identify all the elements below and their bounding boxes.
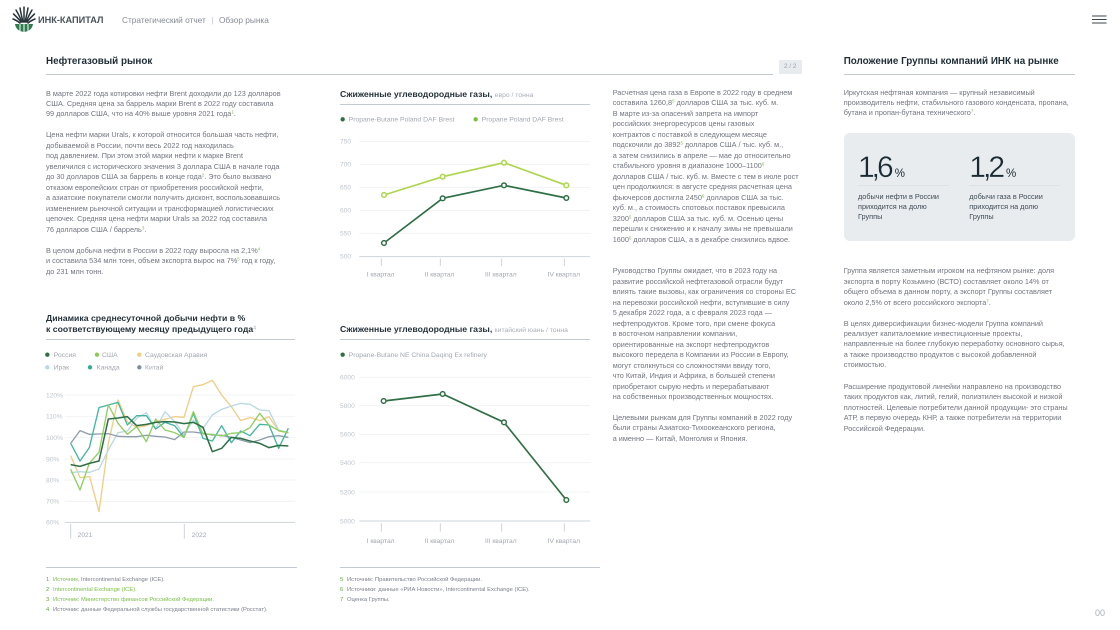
stat: gas share: приходится на долю <box>969 202 1038 211</box>
chart: daily oil production: 80% <box>46 477 59 484</box>
text: production: В целом добыча нефти в России в 2022 году выросла на 2,1%4 <box>46 246 260 255</box>
text: Urals: до 30 долларов США за баррель в конце года2. Это было вызвано <box>46 172 271 181</box>
text: management expectations: на собственных производственных мощностях. <box>613 392 774 401</box>
text: gas price in Europe: а затем снизились в апреле — мае до относительно <box>613 151 791 160</box>
text: production: и составила 534 млн тонн, объем экспорта вырос на 7%5 год к году, <box>46 256 275 265</box>
chart: daily oil production: 100% <box>46 435 63 442</box>
chart: LPG euro per tonne: 700 <box>340 162 351 169</box>
text: gas price in Europe: 32005 долларов США за тыс. куб. м. Осенью цены <box>613 214 783 223</box>
text: market player: Группа является заметным игроком на нефтяном рынке: доля <box>844 266 1054 275</box>
footnotes: left: Источник, Intercontinental Exchange (ICE). <box>53 576 165 582</box>
text: diversification: стоимостью. <box>844 360 886 369</box>
footnotes: right: Источник: Правительство Российской Федерации. <box>347 576 482 582</box>
chart: daily oil production: США <box>102 352 118 359</box>
chart: LPG yuan per tonne: 5000 <box>340 518 355 525</box>
text: gas price in Europe: стабильного уровня в диапазоне 1000–11006 <box>613 161 764 170</box>
text: management expectations: 5 декабря 2022 года, а с февраля 2023 года — <box>613 308 772 317</box>
chart: daily oil production: Канада <box>97 365 120 372</box>
text: management expectations: ориентированные на экспорт нефтепродуктов <box>613 340 769 349</box>
text: diversification <box>844 318 1065 369</box>
text: company intro <box>844 88 1069 117</box>
footnotes: right: 7 <box>340 596 343 602</box>
heading: group market position: Положение Группы компаний ИНК на рынке <box>844 56 1059 66</box>
text: Urals <box>46 130 280 234</box>
chart: daily oil production: Китай <box>145 364 164 372</box>
chart: LPG yuan per tonne <box>340 352 590 545</box>
heading: LPG yuan chart: Сжиженные углеводородные газы, китайский юань / тонна <box>340 324 568 334</box>
heading: daily production chart: к соответствующему месяцу предыдущего года4 <box>46 324 256 334</box>
chart: LPG euro per tonne: 550 <box>340 231 351 238</box>
text: management expectations: что Китай, Индия и Африка, в большей степени <box>613 371 775 380</box>
chart: LPG yuan per tonne: Propane-Butane NE China Daqing Ex refinery <box>349 352 488 359</box>
text: gas price in Europe: Расчетная цена газа в Европе в 2022 году в среднем <box>613 88 792 97</box>
brand name: ИНК-КАПИТАЛ <box>38 15 103 25</box>
heading: daily production chart: Динамика среднесуточной добычи нефти в % <box>46 312 245 322</box>
footnotes: right: 5 <box>340 576 343 582</box>
text: management expectations <box>613 266 796 401</box>
chart: LPG euro per tonne: 650 <box>340 185 351 192</box>
stat: oil share: приходится на долю <box>858 202 927 211</box>
text: management expectations: высокого передела в Компании из России в Европу, <box>613 350 789 359</box>
chart: LPG euro per tonne: Propane-Butane Poland DAF Brest <box>349 117 455 124</box>
text: management expectations: на перевозки российской нефти, вступившие в силу <box>613 298 789 307</box>
stat: gas share: добычи газа в России <box>969 192 1043 200</box>
text: company intro: бутана и пропан-бутана технического7. <box>844 108 975 117</box>
text: gas price in Europe: куб. м., а стоимость спотовых поставок превысила <box>613 203 785 212</box>
footnotes: left: 2 <box>46 586 49 592</box>
chart: LPG euro per tonne: II квартал <box>425 272 455 279</box>
stat: gas share: Группы <box>969 212 994 221</box>
text: Urals: Цена нефти марки Urals, к которой относится большая часть нефти, <box>46 130 278 139</box>
footnotes: right <box>340 576 530 602</box>
text: Urals: увеличился с исторического значения 3 доллара США в начале года <box>46 162 279 171</box>
text: Urals: 76 долларов США / баррель3. <box>46 225 146 234</box>
page number: 00 <box>1095 608 1105 618</box>
footnotes: left <box>46 576 268 612</box>
text: company intro: производитель нефти, стабильного газового конденсата, пропана, <box>844 98 1069 107</box>
stat: gas share: 1,2 % <box>969 151 1016 184</box>
chart: LPG euro per tonne: 750 <box>340 139 351 146</box>
text: production <box>46 246 275 276</box>
text: management expectations: в восточном направлении компании, <box>613 329 737 338</box>
chart: LPG yuan per tonne: IV квартал <box>548 538 580 545</box>
text: gas price in Europe: 16006 долларов США, а в декабре снизились вдвое. <box>613 235 790 244</box>
chart: LPG yuan per tonne: 5600 <box>340 432 355 439</box>
text: management expectations: могут столкнуться со сложностями ввиду того, <box>613 361 771 370</box>
chart: LPG euro per tonne: Propane Poland DAF Brest <box>482 117 564 124</box>
stat: oil share <box>858 151 949 221</box>
chart: daily oil production: Ирак <box>54 365 69 372</box>
text: Urals: а азиатские покупатели смогли получить дисконт, воспользовавшись <box>46 193 280 202</box>
chart: LPG yuan per tonne: I квартал <box>367 538 395 545</box>
text: gas price in Europe <box>612 88 799 244</box>
text: market player <box>844 266 1054 307</box>
text: management expectations: Руководство Группы ожидает, что в 2023 году на <box>613 266 777 275</box>
text: Urals: под давлением. При этом этой марки нефти к марке Brent <box>46 151 243 160</box>
chart: LPG yuan per tonne: 5800 <box>340 403 355 410</box>
chart: LPG euro per tonne: 500 <box>340 254 351 261</box>
text: diversification: а также производство продуктов с высокой добавленной <box>844 350 1036 359</box>
text: company intro: Иркутская нефтяная компания — крупный независимый <box>844 88 1035 96</box>
heading: LPG euro chart: Сжиженные углеводородные газы, евро / тонна <box>340 89 533 99</box>
text: Brent: 99 долларов США, что на 40% выше уровня 2021 года1. <box>46 109 236 118</box>
chart: daily oil production: 120% <box>46 392 63 399</box>
footnotes: right: Оценка Группы. <box>347 596 390 602</box>
text: management expectations: развитие российской нефтегазовой отрасли будут <box>613 277 783 286</box>
text: diversification: реализует капиталоемкие инвестиционные проекты, <box>844 329 1023 338</box>
text: product line: АТР, в первую очередь КНР, а также потребители на территории <box>844 413 1061 422</box>
text: Brent <box>46 88 281 118</box>
page badge: 2 / 2 <box>784 63 796 70</box>
text: management expectations: нефтепродуктов. Кроме того, при смене фокуса <box>613 319 775 328</box>
text: gas price in Europe: контрактов с поставкой в следующем месяце <box>613 130 767 139</box>
footnotes: right: 6 <box>340 586 343 592</box>
text: product line <box>844 382 1068 433</box>
text: product line: плотностей. Целевые потребители данной продукции- это страны <box>844 403 1068 412</box>
chart: daily oil production: Саудовская Аравия <box>145 352 208 359</box>
text: gas price in Europe: перешли к снижению и к началу зимы не превышали <box>613 224 793 233</box>
text: gas price in Europe: российских энергоресурсов цены газовых <box>613 119 754 128</box>
text: target markets: были страны Азиатско-Тихоокеанского региона, <box>613 423 776 432</box>
text: Brent: В марте 2022 года котировки нефти Brent доходили до 123 долларов <box>46 88 281 98</box>
stat: oil share: добычи нефти в России <box>858 192 939 200</box>
text: gas price in Europe: фьючерсов достигла 24506 долларов США за тыс. <box>613 193 784 202</box>
chart: daily oil production: 2021 <box>78 532 93 539</box>
footnotes: left: Intercontinental Exchange (ICE). <box>53 586 137 592</box>
footnotes: left: Источник: Министерство финансов Российской Федерации. <box>53 596 214 602</box>
text: market player: около 2,5% от всего российского экспорта7. <box>844 298 991 307</box>
text: management expectations: влиять такие вызовы, как ограничения со стороны ЕС <box>613 287 796 296</box>
text: target markets: а именно — Китай, Монголия и Япония. <box>613 434 748 443</box>
footnotes: left: 1 <box>46 576 49 582</box>
text: product line: Расширение продуктовой линейки направлено на производство <box>844 382 1061 391</box>
chart: daily oil production: 110% <box>46 414 63 421</box>
text: management expectations: приобретают сырую нефть и перерабатывают <box>613 382 769 391</box>
text: gas price in Europe: составила 1260,85 долларов США за тыс. куб. м. <box>613 98 778 107</box>
panel: market shares <box>844 133 1074 241</box>
text: market player: общего объема в данном порту, а экспорт Группы составляет <box>844 287 1052 296</box>
footnotes: right: Источники: данные «РИА Новости», Intercontinental Exchange (ICE). <box>347 586 530 592</box>
chart: daily oil production: Россия <box>54 352 76 359</box>
text: product line: Российской Федерации. <box>844 424 925 433</box>
footnotes: left: 3 <box>46 596 49 602</box>
text: gas price in Europe: В марте из-за опасений запрета на импорт <box>613 109 758 118</box>
chart: daily oil production <box>45 352 295 539</box>
chart: LPG yuan per tonne: II квартал <box>425 538 455 545</box>
text: production: до 231 млн тонн. <box>46 267 103 276</box>
text: diversification: В целях диверсификации бизнес-модели Группа компаний <box>844 318 1043 328</box>
stat: oil share: Группы <box>858 212 882 221</box>
text: Brent: США. Средняя цена за баррель марки Brent в 2022 году составила <box>46 99 274 108</box>
chart: LPG yuan per tonne: 5400 <box>340 460 355 467</box>
text: gas price in Europe: подскочили до 38925 долларов США / тыс. куб. м., <box>613 140 783 149</box>
text: target markets: Целевыми рынкам для Группы компаний в 2022 году <box>613 413 792 422</box>
text: product line: таких продуктов как, литий, гелий, полиэтилен высокой и низкой <box>844 392 1062 401</box>
chart: daily oil production: 90% <box>46 456 59 463</box>
text: Urals: отказом европейских стран от приобретения российской нефти, <box>46 183 264 192</box>
chart: LPG euro per tonne <box>340 117 590 279</box>
text: gas price in Europe: цен продолжился: в августе средняя расчетная цена <box>613 182 792 191</box>
chart: LPG euro per tonne: III квартал <box>485 272 517 279</box>
chart: LPG yuan per tonne: III квартал <box>485 538 517 545</box>
chart: LPG yuan per tonne: 6000 <box>340 375 355 382</box>
chart: LPG yuan per tonne: 5200 <box>340 489 355 496</box>
footnotes: left: 4 <box>46 606 49 612</box>
text: market player: экспорта в порту Козьмино (ВСТО) составляет около 14% от <box>844 277 1049 286</box>
text: Urals: изменением рыночной ситуации и трансформацией логистических <box>46 204 274 213</box>
text: Urals: цепочек. Средняя цена нефти марки Urals за 2022 год составила <box>46 214 267 223</box>
chart: daily oil production: 70% <box>46 499 59 506</box>
text: Urals: добываемой в России, почти весь 2022 год находилась <box>46 141 234 150</box>
heading: daily production chart <box>46 312 256 334</box>
chart: daily oil production: 2022 <box>192 532 207 539</box>
footnotes: left: Источник: данные Федеральной службы государственной статистики (Росстат). <box>53 606 268 612</box>
chart: daily oil production: 60% <box>46 520 59 527</box>
stat: oil share: 1,6 % <box>858 151 905 184</box>
text: diversification: направленные на более глубокую переработку основного сырья, <box>844 339 1065 348</box>
stat: gas share <box>969 151 1060 221</box>
logo <box>12 6 36 32</box>
chart: LPG euro per tonne: I квартал <box>367 272 395 279</box>
chart: LPG euro per tonne: 600 <box>340 208 351 215</box>
heading: oil and gas market: Нефтегазовый рынок <box>46 56 152 66</box>
page badge <box>779 60 802 74</box>
text: target markets <box>613 413 792 443</box>
text: gas price in Europe: долларов США / тыс. куб. м. Вместе с тем в июле рост <box>613 172 799 181</box>
icon: menu <box>1092 16 1106 24</box>
chart: LPG euro per tonne: IV квартал <box>548 272 580 279</box>
breadcrumb: Стратегический отчет | Обзор рынка <box>122 14 269 24</box>
